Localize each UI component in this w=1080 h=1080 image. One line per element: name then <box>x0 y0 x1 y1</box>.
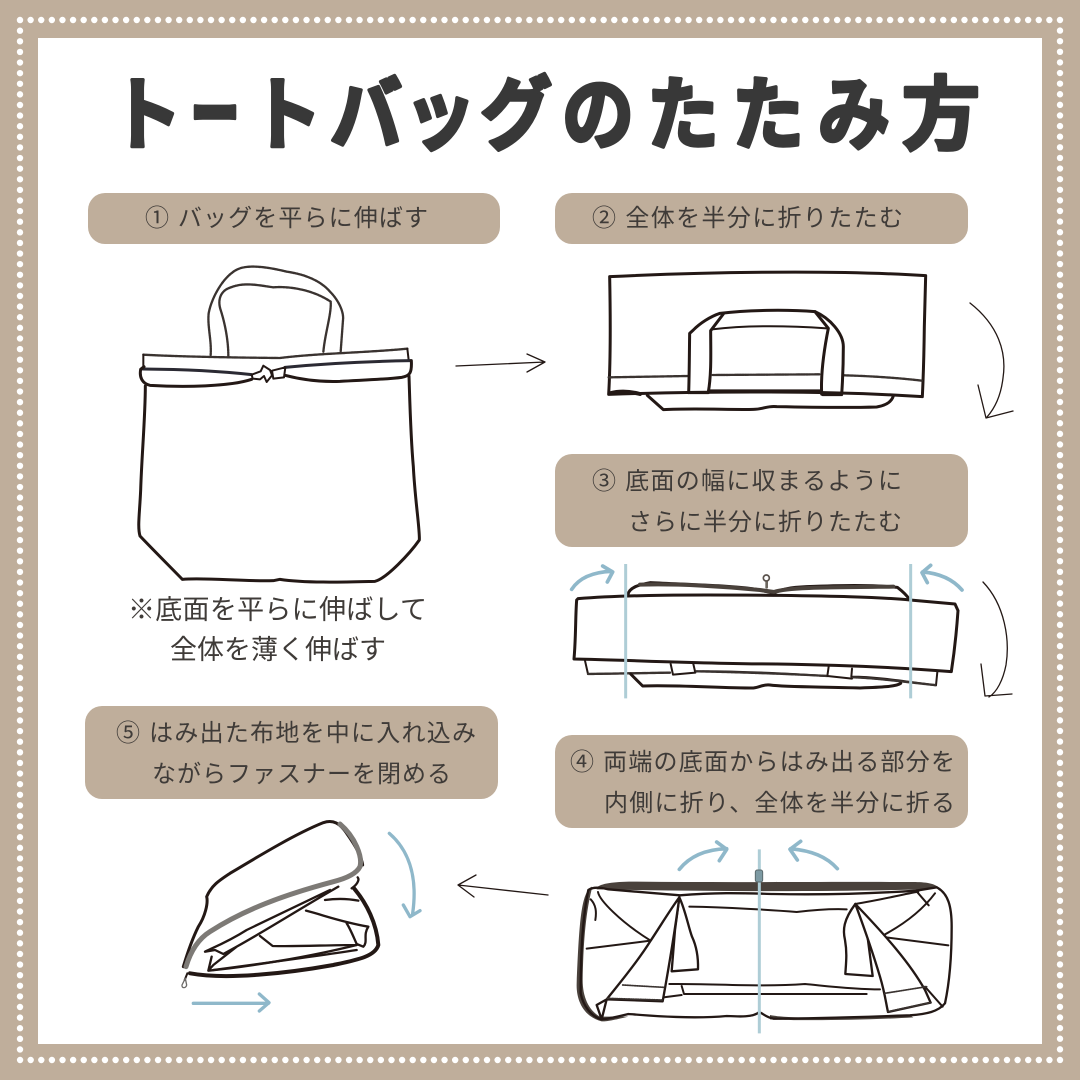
title: バ <box>330 50 402 166</box>
icon: blue fold arrows, step 4 <box>679 841 837 869</box>
step 5 heading: ⑤ はみ出た布地を中に入れ込み <box>116 720 476 747</box>
title: グ <box>480 50 552 166</box>
step 3 heading: さらに半分に折りたたむ <box>628 509 902 536</box>
arrow: step 4 to step 5 <box>458 875 548 897</box>
step 3 heading <box>555 454 968 547</box>
step 4 heading: 内側に折り、全体を半分に折る <box>604 790 955 817</box>
note under bag: 全体を薄く伸ばす <box>170 635 386 665</box>
arrow: fold down, step 2 <box>970 303 1013 418</box>
arrow: step 1 to step 2 <box>456 354 545 372</box>
title: ッ <box>404 50 476 166</box>
title: ト <box>250 50 322 166</box>
step 5 heading <box>85 706 498 799</box>
arrow: fold down, step 3 <box>981 582 1012 697</box>
title: た <box>732 50 804 166</box>
title <box>110 50 980 167</box>
step 3 heading: ③ 底面の幅に収まるように <box>592 468 902 495</box>
illustration: closing the zipper <box>182 822 420 1011</box>
illustration: bag folded in half <box>609 272 926 410</box>
step 1 heading <box>88 193 500 244</box>
title: ー <box>190 52 240 167</box>
illustration: bag folded into thirds <box>574 564 958 698</box>
step 2 heading: ② 全体を半分に折りたたむ <box>592 205 903 232</box>
step 4 heading: ④ 両端の底面からはみ出る部分を <box>570 749 955 776</box>
icon: blue fold arrows, step 3 <box>572 565 962 590</box>
step 1 heading: ① バッグを平らに伸ばす <box>145 205 428 232</box>
illustration: flat tote bag <box>139 267 419 582</box>
step 5 heading: ながらファスナーを閉める <box>152 761 451 788</box>
step 2 heading <box>555 193 968 244</box>
title: た <box>647 50 719 166</box>
note under bag <box>128 595 427 665</box>
title: み <box>818 50 890 166</box>
note under bag: ※底面を平らに伸ばして <box>128 595 427 625</box>
title: 方 <box>902 50 980 166</box>
title: の <box>562 50 634 166</box>
title: ト <box>110 50 182 166</box>
illustration: folded sides <box>577 849 952 1033</box>
step 4 heading <box>555 735 968 828</box>
